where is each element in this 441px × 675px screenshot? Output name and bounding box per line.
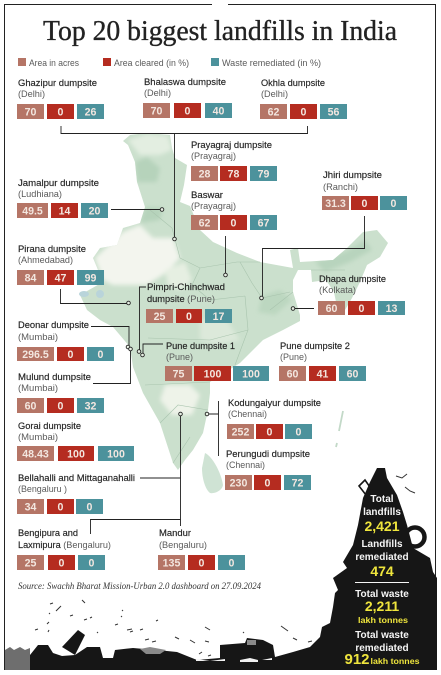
site: Perungudi: 72 <box>292 478 303 490</box>
stat: landfills remediated: Landfills <box>361 539 403 550</box>
site: Dhapa: (Kolkata) <box>319 285 356 295</box>
site: Pune 1: 100 <box>204 368 221 380</box>
site: Pune 1: Pune dumpsite 1 <box>166 340 235 351</box>
site: Bhalaswa: 40 <box>213 106 224 118</box>
site: Pune 2: (Pune) <box>280 352 307 362</box>
site: Prayagraj: 79 <box>258 168 269 180</box>
source note: Source: Swachh Bharat Mission-Urban 2.0 dashboard on 27.09.2024 <box>18 581 261 591</box>
site: Mulund <box>17 371 104 413</box>
site: Bengipura and Laxmipura <box>17 527 111 570</box>
site: Jamalpur: 20 <box>89 206 100 218</box>
site: Deonar: Deonar dumpsite <box>18 319 89 330</box>
site: Okhla <box>260 77 347 119</box>
site: Okhla: 0 <box>301 106 307 118</box>
site: Jhiri: (Ranchi) <box>323 182 358 192</box>
site: Jhiri: 31.3 <box>325 198 346 210</box>
site: Mandur: Mandur <box>159 527 191 538</box>
site: Pirana: Pirana dumpsite <box>18 243 86 254</box>
site: Pirana: 99 <box>85 272 96 284</box>
site: Kodungaiyur: 0 <box>267 426 273 438</box>
site: Pune 2 <box>279 340 366 381</box>
birds and flying debris <box>35 474 415 656</box>
title: Top 20 biggest landfills in India <box>43 16 398 47</box>
site: Bhalaswa <box>143 76 232 118</box>
site: Bellahalli and Mittaganahalli: Bellahalli and Mittaganahalli <box>18 472 135 483</box>
site: Okhla: 62 <box>268 106 279 118</box>
site: Dhapa: 60 <box>326 303 337 315</box>
map: Sri Lanka <box>202 453 223 493</box>
stat: total landfills: Total <box>370 494 394 505</box>
site: Bhalaswa: 70 <box>151 106 162 118</box>
stat: total waste remediated: 912 <box>344 651 370 668</box>
site: Bengipura and Laxmipura: 0 <box>59 558 65 570</box>
site: Jhiri: 0 <box>362 198 368 210</box>
site: Baswar <box>191 189 277 230</box>
site: Pimpri-Chinchwad: 17 <box>213 311 224 323</box>
stat: total waste remediated <box>344 630 420 668</box>
site: Perungudi: (Chennai) <box>226 460 265 470</box>
site: Dhapa: Dhapa dumpsite <box>319 273 386 284</box>
site: Bengipura and Laxmipura: Bengipura and <box>18 527 78 538</box>
site: Baswar: 67 <box>258 218 269 230</box>
site: Mulund: 32 <box>85 400 96 412</box>
site: Pune 1: 100 <box>242 368 260 380</box>
site: Prayagraj: 28 <box>199 168 210 180</box>
site: Bellahalli and Mittaganahalli: 34 <box>25 502 36 514</box>
site: Deonar: (Mumbai) <box>18 332 58 342</box>
site: Bellahalli and Mittaganahalli <box>17 472 135 514</box>
site: Kodungaiyur <box>227 397 321 439</box>
site: Pimpri-Chinchwad <box>146 281 232 323</box>
site: Gorai: 100 <box>67 448 85 460</box>
site: Dhapa: 13 <box>386 303 397 315</box>
site: Mulund: Mulund dumpsite <box>18 371 91 382</box>
site: Ghazipur: Ghazipur dumpsite <box>18 77 97 88</box>
landfill silhouette <box>5 468 437 670</box>
site: Dhapa <box>318 273 405 315</box>
site: Deonar: 0 <box>68 349 74 361</box>
site: Jhiri <box>322 169 407 210</box>
site: Jhiri: 0 <box>391 198 397 210</box>
site: Mandur: (Bengaluru) <box>159 540 207 550</box>
site: Bengipura and Laxmipura: 0 <box>89 558 95 570</box>
site: Ghazipur <box>17 77 104 119</box>
site: Baswar: 0 <box>231 218 237 230</box>
site: Ghazipur: 70 <box>25 106 36 118</box>
site: Bellahalli and Mittaganahalli: (Bengaluru ) <box>18 484 67 494</box>
site: Perungudi: 230 <box>230 478 247 490</box>
site: Bellahalli and Mittaganahalli: 0 <box>58 502 64 514</box>
site: Mulund: 0 <box>58 400 64 412</box>
site: Gorai <box>17 420 134 461</box>
stat: landfills remediated: remediated <box>355 552 409 563</box>
site: Gorai: (Mumbai) <box>18 432 58 442</box>
site: Kodungaiyur: (Chennai) <box>228 409 267 419</box>
stat: total landfills: 2,421 <box>364 518 400 534</box>
location markers <box>126 208 295 416</box>
site: Kodungaiyur: 252 <box>232 426 249 438</box>
legend <box>18 58 321 68</box>
map of India <box>75 130 395 475</box>
site: Pune 1 <box>165 340 269 381</box>
site: Pune 1: (Pune) <box>166 352 193 362</box>
site: Jamalpur: 14 <box>59 206 70 218</box>
stat: landfills remediated <box>355 539 409 579</box>
site: Bhalaswa: (Delhi) <box>144 88 171 98</box>
site: Prayagraj: (Prayagraj) <box>191 151 236 161</box>
site: Perungudi <box>225 448 311 490</box>
site: Gorai: Gorai dumpsite <box>18 420 81 431</box>
site: Mandur: 135 <box>163 558 180 570</box>
site: Mulund: 60 <box>25 400 36 412</box>
site: Kodungaiyur: 0 <box>296 426 302 438</box>
site: Bhalaswa: 0 <box>185 106 191 118</box>
legend: Area in acres <box>29 58 79 68</box>
site: Baswar: Baswar <box>191 189 223 200</box>
site: Kodungaiyur: Kodungaiyur dumpsite <box>228 397 321 408</box>
site: Okhla: 56 <box>328 106 339 118</box>
site: Baswar: (Prayagraj) <box>191 201 236 211</box>
site: Deonar: 296.5 <box>22 349 49 361</box>
site: Jamalpur <box>17 177 108 218</box>
site: Okhla: (Delhi) <box>261 89 288 99</box>
stat: total landfills: landfills <box>363 507 401 518</box>
site: Deonar <box>17 319 114 361</box>
site: Dhapa: 0 <box>359 303 365 315</box>
site: Bellahalli and Mittaganahalli: 0 <box>87 502 93 514</box>
site: Jamalpur: (Ludhiana) <box>18 189 62 199</box>
site: Jamalpur: Jamalpur dumpsite <box>18 177 99 188</box>
stat: total waste remediated: remediated <box>355 643 409 654</box>
site: Pimpri-Chinchwad: dumpsite (Pune) <box>147 293 215 304</box>
site: Mandur <box>158 527 245 570</box>
site: Pune 2: Pune dumpsite 2 <box>280 340 350 351</box>
site: Pune 2: 60 <box>287 368 298 380</box>
site: Pune 2: 60 <box>347 368 358 380</box>
site: Okhla: Okhla dumpsite <box>261 77 325 88</box>
site: Bhalaswa: Bhalaswa dumpsite <box>144 76 226 87</box>
site: Prayagraj: Prayagraj dumpsite <box>191 139 272 150</box>
stat: landfills remediated: 474 <box>370 563 394 579</box>
stat: total waste remediated: lakh tonnes <box>370 657 420 666</box>
site: Ghazipur: 0 <box>58 106 64 118</box>
stat: total waste remediated: Total waste <box>355 630 409 641</box>
site: Gorai: 100 <box>107 448 125 460</box>
site: Pimpri-Chinchwad: Pimpri-Chinchwad <box>147 281 225 292</box>
site: Jamalpur: 49.5 <box>22 206 43 218</box>
site: Pirana: 47 <box>55 272 66 284</box>
stat: total waste <box>355 589 409 625</box>
site: Baswar: 62 <box>199 218 210 230</box>
site: Pirana <box>17 243 104 285</box>
site: Deonar: 0 <box>98 349 104 361</box>
stat: total waste: 2,211 <box>365 598 399 614</box>
site: Mulund: (Mumbai) <box>18 383 58 393</box>
site: Jhiri: Jhiri dumpsite <box>323 169 382 180</box>
stat: total landfills <box>363 494 401 534</box>
divider <box>355 582 409 583</box>
stat: total waste: lakh tonnes <box>358 616 409 625</box>
stat: total waste: Total waste <box>355 589 409 600</box>
site: Pirana: 84 <box>25 272 36 284</box>
legend: Waste remediated (in %) <box>222 58 321 68</box>
site: Ghazipur: 26 <box>85 106 96 118</box>
site: Pune 1: 75 <box>173 368 184 380</box>
site: Bengipura and Laxmipura: 25 <box>25 558 36 570</box>
site: Pimpri-Chinchwad: 0 <box>186 311 192 323</box>
site: Mandur: 0 <box>229 558 235 570</box>
site: Ghazipur: (Delhi) <box>18 89 45 99</box>
connector lines <box>60 126 364 534</box>
site: Perungudi: Perungudi dumpsite <box>226 448 310 459</box>
site: Mandur: 0 <box>199 558 205 570</box>
site: Bengipura and Laxmipura: Laxmipura (Bengaluru) <box>18 539 111 550</box>
legend: Area cleared (in %) <box>114 58 189 68</box>
site: Prayagraj <box>191 139 277 181</box>
site: Pune 2: 41 <box>317 368 328 380</box>
site: Prayagraj: 78 <box>228 168 239 180</box>
site: Pirana: (Ahmedabad) <box>18 255 73 265</box>
site: Pimpri-Chinchwad: 25 <box>154 311 165 323</box>
site: Gorai: 48.43 <box>22 448 49 460</box>
site: Perungudi: 0 <box>265 478 271 490</box>
